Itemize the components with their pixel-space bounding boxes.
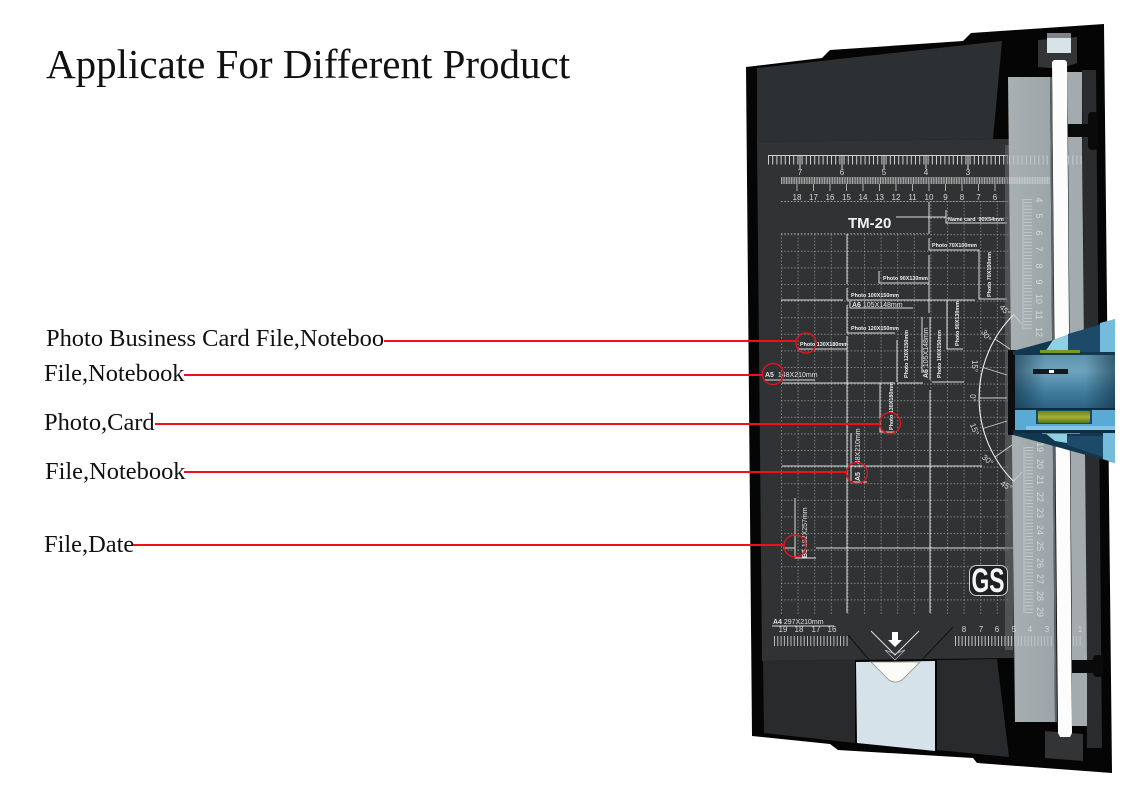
lower right ruler: 7 — [979, 625, 984, 634]
upper centimetre ruler: 13 — [875, 193, 884, 202]
glass cm scale: 24 — [1035, 525, 1045, 535]
rail clamps — [1068, 112, 1103, 677]
glass cm scale: 20 — [1035, 459, 1045, 469]
format labels: B5 182X257mm — [802, 507, 809, 558]
glass cm scale: 9 — [1034, 279, 1044, 285]
A4 label and lower left ruler: 17 — [812, 625, 821, 634]
upper centimetre ruler: 12 — [892, 193, 901, 202]
glass cm scale: 27 — [1035, 574, 1045, 584]
glass cm scale: 21 — [1035, 475, 1045, 485]
GS certification mark: GS — [972, 562, 1004, 600]
protractor: 45° — [999, 479, 1014, 493]
white cutting bar — [1052, 60, 1072, 737]
glass cm scale: 26 — [1035, 558, 1045, 568]
top cover panel — [757, 41, 1002, 142]
trimmer body — [746, 24, 1112, 773]
format labels: Photo 120X150mm — [851, 326, 899, 332]
format labels: Photo 70X100mm — [987, 252, 993, 297]
A4 label and lower left ruler: 18 — [795, 625, 804, 634]
glass cm scale — [1023, 197, 1045, 617]
format labels: Photo 90X130mm — [883, 276, 928, 282]
glass cm scale: 4 — [1034, 197, 1044, 203]
callout: photo business card: Photo Business Card File,Noteboo — [46, 325, 384, 352]
format labels: Photo 120X150mm — [904, 330, 910, 378]
glass cm scale: 25 — [1035, 541, 1045, 551]
dashed grid — [781, 201, 1009, 614]
glass cm scale: 29 — [1035, 607, 1045, 617]
protractor: 15° — [970, 360, 979, 372]
format labels: Photo 100X150mm — [851, 293, 899, 299]
protractor — [968, 303, 1022, 493]
upper inch ruler: 3 — [966, 168, 971, 177]
right rail: glass scale — [1008, 77, 1055, 722]
lower right ruler: 6 — [995, 625, 1000, 634]
lower right ruler: 8 — [962, 625, 967, 634]
callout: file notebook rotated — [45, 458, 868, 485]
bottom paper tray — [856, 661, 935, 751]
format labels: A5 148X210mm — [855, 428, 862, 481]
glass cm scale: 7 — [1034, 246, 1044, 252]
upper centimetre ruler: 6 — [993, 193, 998, 202]
callout: file date — [44, 531, 806, 558]
lower right ruler: 4 — [1028, 625, 1033, 634]
upper centimetre ruler: 17 — [809, 193, 818, 202]
upper centimetre ruler: 10 — [925, 193, 934, 202]
format labels: Photo 90X130mm — [955, 301, 961, 346]
cutting board — [757, 139, 1014, 661]
lower right ruler: 5 — [1012, 625, 1017, 634]
bottom left panel — [763, 660, 855, 743]
glass cm scale: 23 — [1035, 508, 1045, 518]
protractor: 45° — [997, 303, 1012, 318]
white V notch — [871, 662, 920, 682]
rulers seen through glass — [1009, 160, 1082, 180]
upper inch ruler: 6 — [840, 168, 845, 177]
upper inch ruler — [768, 155, 1008, 177]
glass cm scale: 28 — [1035, 591, 1045, 601]
A4 label and lower left ruler — [772, 619, 848, 641]
format labels: Photo 70X100mm — [932, 243, 977, 249]
upper centimetre ruler: 9 — [943, 193, 948, 202]
insertion guide and arrow — [848, 627, 953, 662]
callout: photo business card — [46, 325, 816, 353]
bottom end block — [1045, 731, 1083, 761]
format labels: A6 105X148mm — [852, 302, 903, 309]
glass cm scale: 22 — [1035, 492, 1045, 502]
translucent edge of scale — [1005, 145, 1013, 650]
glass cm scale: 6 — [1034, 230, 1044, 236]
A4 label and lower left ruler: 19 — [779, 625, 788, 634]
right rail: dark strip — [1082, 70, 1102, 748]
upper inch ruler: 7 — [798, 168, 803, 177]
blue cutting carriage — [1008, 319, 1115, 463]
upper centimetre ruler — [781, 180, 1009, 202]
format labels: Name card 90X54mm — [948, 217, 1004, 223]
protractor: 30° — [980, 453, 995, 467]
lower right ruler — [955, 625, 1083, 641]
upper inch ruler: 5 — [882, 168, 887, 177]
glass cm scale: 5 — [1034, 213, 1044, 219]
format labels: A5 148X210mm — [765, 372, 818, 379]
model name: TM-20 — [848, 215, 891, 232]
right rail: inner grey strip — [1067, 72, 1087, 726]
format labels: A6 105X148mm — [923, 327, 930, 378]
callout: photo card — [44, 409, 900, 436]
callout: file notebook A5: File,Notebook — [44, 360, 185, 387]
upper centimetre ruler: 16 — [826, 193, 835, 202]
upper centimetre ruler: 15 — [842, 193, 851, 202]
protractor: 0° — [968, 394, 977, 402]
glass cm scale: 19 — [1035, 442, 1045, 452]
glass cm scale: 11 — [1034, 310, 1044, 320]
upper centimetre ruler: 7 — [976, 193, 981, 202]
upper inch ruler: 4 — [924, 168, 929, 177]
callout: file notebook A5 — [44, 360, 784, 387]
lower right ruler: 3 — [1045, 625, 1050, 634]
protractor: 30° — [979, 328, 993, 343]
protractor: 15° — [968, 422, 981, 436]
paper trimmer product — [746, 24, 1115, 773]
glass cm scale: 8 — [1034, 263, 1044, 269]
format labels: Photo 130X180mm — [889, 382, 895, 430]
callout: photo card: Photo,Card — [44, 409, 155, 436]
format guide lines — [765, 202, 1023, 613]
upper centimetre ruler: 14 — [859, 193, 868, 202]
format labels: Photo 130X180mm — [800, 342, 848, 348]
format labels: Photo 100X150mm — [937, 330, 943, 378]
upper centimetre ruler: 8 — [960, 193, 965, 202]
title: Applicate For Different Product — [46, 41, 571, 87]
A4 label and lower left ruler: A4 297X210mm — [773, 619, 824, 626]
callout: file notebook rotated: File,Notebook — [45, 458, 186, 485]
format labels — [765, 217, 1004, 558]
upper centimetre ruler: 18 — [793, 193, 802, 202]
A4 label and lower left ruler: 16 — [828, 625, 837, 634]
bottom right panel — [937, 659, 1009, 757]
glass cm scale: 10 — [1034, 294, 1044, 304]
top end block — [1038, 33, 1077, 68]
lower right ruler: 1 — [1078, 625, 1083, 634]
callout: file date: File,Date — [44, 531, 134, 558]
glass cm scale: 12 — [1034, 327, 1044, 337]
upper centimetre ruler: 11 — [908, 193, 917, 202]
